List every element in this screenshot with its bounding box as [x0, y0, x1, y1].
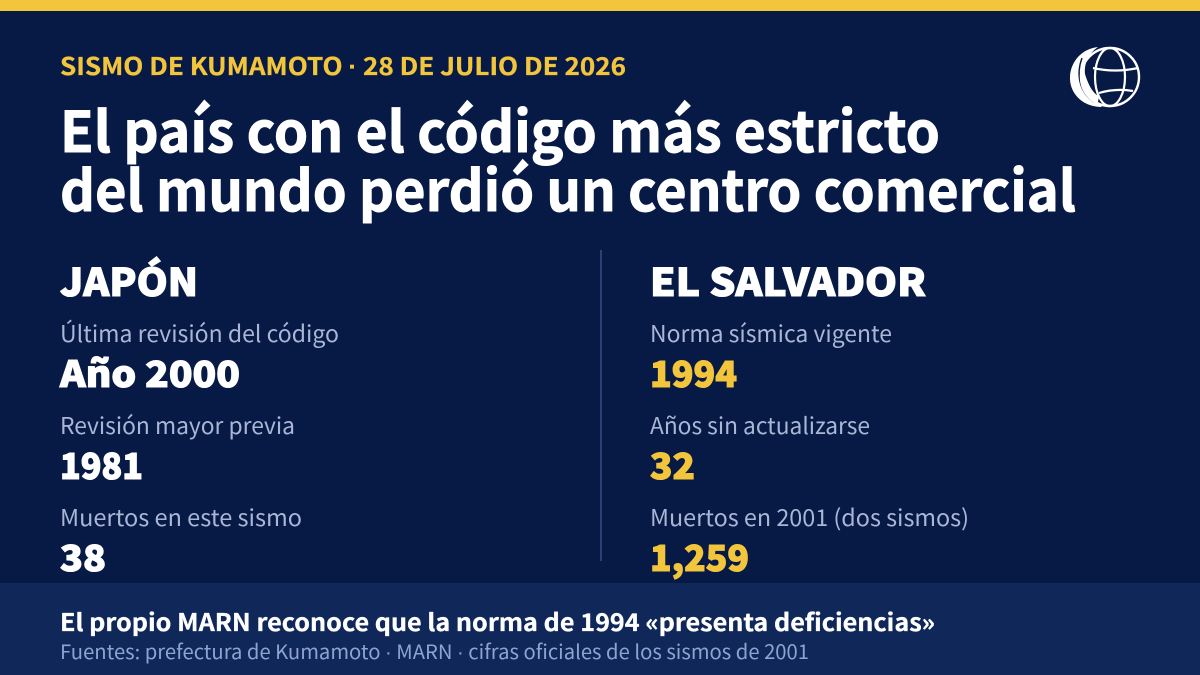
label: última revisión: Última revisión del código	[60, 315, 339, 349]
icon: globe and wing logo	[1070, 47, 1139, 107]
label: muertos: Muertos en este sismo	[60, 499, 302, 533]
title	[60, 88, 1076, 228]
value: 32: 32	[650, 438, 695, 490]
heading: Japón: JAPÓN	[60, 252, 198, 307]
footer statement: El propio MARN reconoce que la norma de 1994 «presenta deficiencias»	[60, 603, 935, 638]
value: 1,259: 1,259	[650, 530, 749, 582]
label: muertos 2001: Muertos en 2001 (dos sismos)	[650, 499, 969, 533]
top accent bar	[0, 0, 1200, 11]
value: 1981: 1981	[60, 438, 143, 490]
label: revisión mayor: Revisión mayor previa	[60, 407, 295, 441]
panel: Japón	[59, 252, 339, 582]
sources: Fuentes: prefectura de Kumamoto · MARN · cifras oficiales de los sismos de 2001	[60, 636, 809, 665]
footer band	[0, 583, 1200, 675]
value: 1994: 1994	[650, 346, 737, 398]
title: El país con el código más estricto	[60, 88, 940, 169]
value: año 2000: Año 2000	[59, 346, 240, 398]
label: norma: Norma sísmica vigente	[650, 315, 892, 349]
kicker: SISMO DE KUMAMOTO · 28 DE JULIO DE 2026	[60, 47, 626, 82]
value: 38: 38	[60, 530, 106, 582]
title: del mundo perdió un centro comercial	[60, 147, 1076, 228]
panel: El Salvador	[650, 252, 969, 582]
heading: El Salvador: EL SALVADOR	[650, 252, 926, 307]
label: años: Años sin actualizarse	[650, 407, 870, 441]
